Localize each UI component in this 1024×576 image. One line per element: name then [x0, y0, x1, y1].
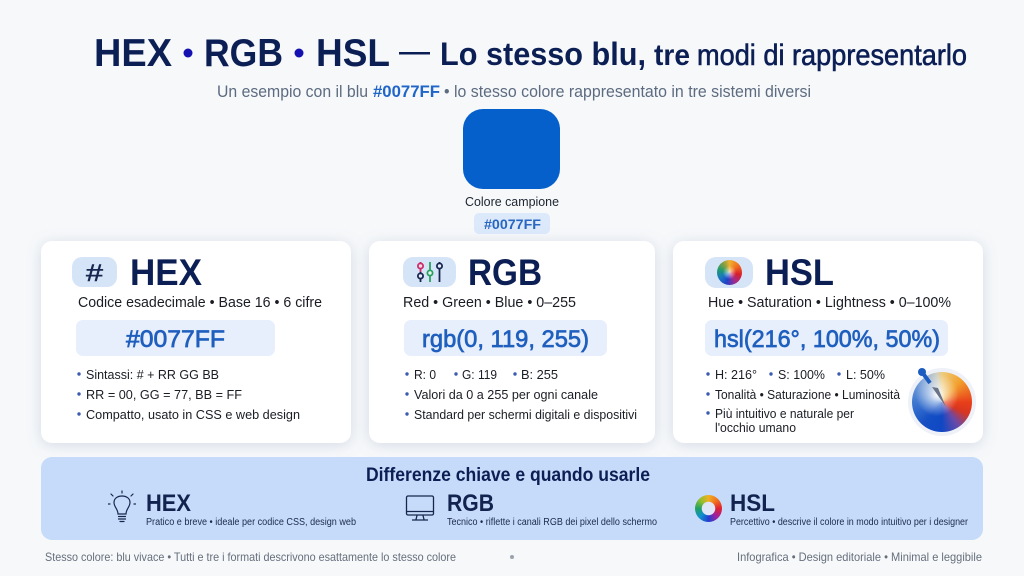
subtitle: #0077FF — [373, 82, 440, 101]
RGB summary: RGB — [447, 490, 494, 517]
footer dot — [510, 555, 514, 559]
icon: sliders — [403, 257, 456, 287]
HEX description: Codice esadecimale • Base 16 • 6 cifre — [78, 294, 322, 311]
panel: HEX — [41, 241, 351, 443]
RGB heading: RGB — [468, 252, 542, 293]
subtitle: Un esempio con il blu — [217, 82, 368, 101]
title: RGB — [204, 32, 283, 75]
HSL bullets: Tonalità • Saturazione • Luminosità — [715, 387, 901, 402]
subtitle — [217, 82, 811, 101]
RGB bullets: R: 0 — [414, 367, 436, 382]
icon: hash — [72, 257, 117, 287]
RGB value: rgb(0, 119, 255) — [422, 326, 589, 353]
title: Lo stesso blu, — [440, 36, 646, 72]
HSL summary — [730, 490, 969, 528]
HEX bullets: Compatto, usato in CSS e web design — [86, 407, 300, 422]
icon: colour wheel — [908, 368, 976, 436]
RGB value — [404, 320, 607, 356]
icon: monitor — [406, 496, 434, 520]
icon: hash: # — [86, 260, 104, 287]
HEX bullets: Sintassi: # + RR GG BB — [86, 367, 219, 382]
icon: HSL colour ring — [695, 495, 722, 522]
title: HSL — [316, 32, 390, 75]
title: modi di rappresentarlo — [697, 39, 967, 72]
differences heading: Differenze chiave e quando usarle — [366, 465, 650, 486]
HSL bullets: H: 216° — [715, 367, 757, 382]
HSL bullets — [706, 367, 901, 435]
RGB bullets: Standard per schermi digitali e dispositivi — [414, 407, 637, 422]
HEX summary — [146, 490, 356, 528]
HEX heading: HEX — [130, 252, 202, 293]
swatch code pill — [474, 213, 550, 234]
HSL summary: HSL — [730, 490, 775, 517]
HEX value: #0077FF — [126, 326, 225, 353]
HEX summary: Pratico e breve • ideale per codice CSS, design web — [146, 517, 356, 528]
title: tre — [654, 39, 690, 72]
HSL value: hsl(216°, 100%, 50%) — [714, 326, 940, 353]
swatch code pill: #0077FF — [484, 216, 541, 232]
panel: key differences — [41, 457, 983, 540]
HSL bullets: l'occhio umano — [715, 420, 796, 435]
RGB bullets — [405, 367, 637, 422]
subtitle: • lo stesso colore rappresentato in tre sistemi diversi — [444, 82, 811, 101]
HEX value — [76, 320, 275, 356]
icon: HSL colour ball — [717, 260, 742, 285]
RGB description: Red • Green • Blue • 0–255 — [403, 294, 576, 311]
icon: light bulb — [108, 491, 136, 522]
HSL heading: HSL — [765, 252, 834, 293]
swatch caption: Colore campione — [465, 195, 559, 209]
panel: HSL — [673, 241, 983, 443]
footer left: Stesso colore: blu vivace • Tutti e tre i formati descrivono esattamente lo stesso colore — [45, 550, 456, 564]
RGB bullets: G: 119 — [462, 367, 497, 382]
HSL bullets: Più intuitivo e naturale per — [715, 406, 855, 421]
HEX bullets: RR = 00, GG = 77, BB = FF — [86, 387, 242, 402]
icon pill: HSL — [705, 257, 753, 288]
HEX bullets — [77, 367, 300, 422]
panel: RGB — [369, 241, 655, 443]
HSL bullets: S: 100% — [778, 367, 825, 382]
title: HEX — [94, 32, 172, 75]
HSL bullets: L: 50% — [846, 367, 885, 382]
RGB summary: Tecnico • riflette i canali RGB dei pixel dello schermo — [447, 517, 657, 528]
RGB bullets: Valori da 0 a 255 per ogni canale — [414, 387, 598, 402]
HSL description: Hue • Saturation • Lightness • 0–100% — [708, 294, 951, 311]
HSL summary: Percettivo • descrive il colore in modo intuitivo per i designer — [730, 517, 969, 528]
RGB bullets: B: 255 — [521, 367, 558, 382]
RGB summary — [447, 490, 657, 528]
HEX summary: HEX — [146, 490, 191, 517]
colour swatch — [463, 109, 560, 189]
footer right: Infografica • Design editoriale • Minimal e leggibile — [737, 550, 982, 564]
title — [94, 32, 967, 75]
